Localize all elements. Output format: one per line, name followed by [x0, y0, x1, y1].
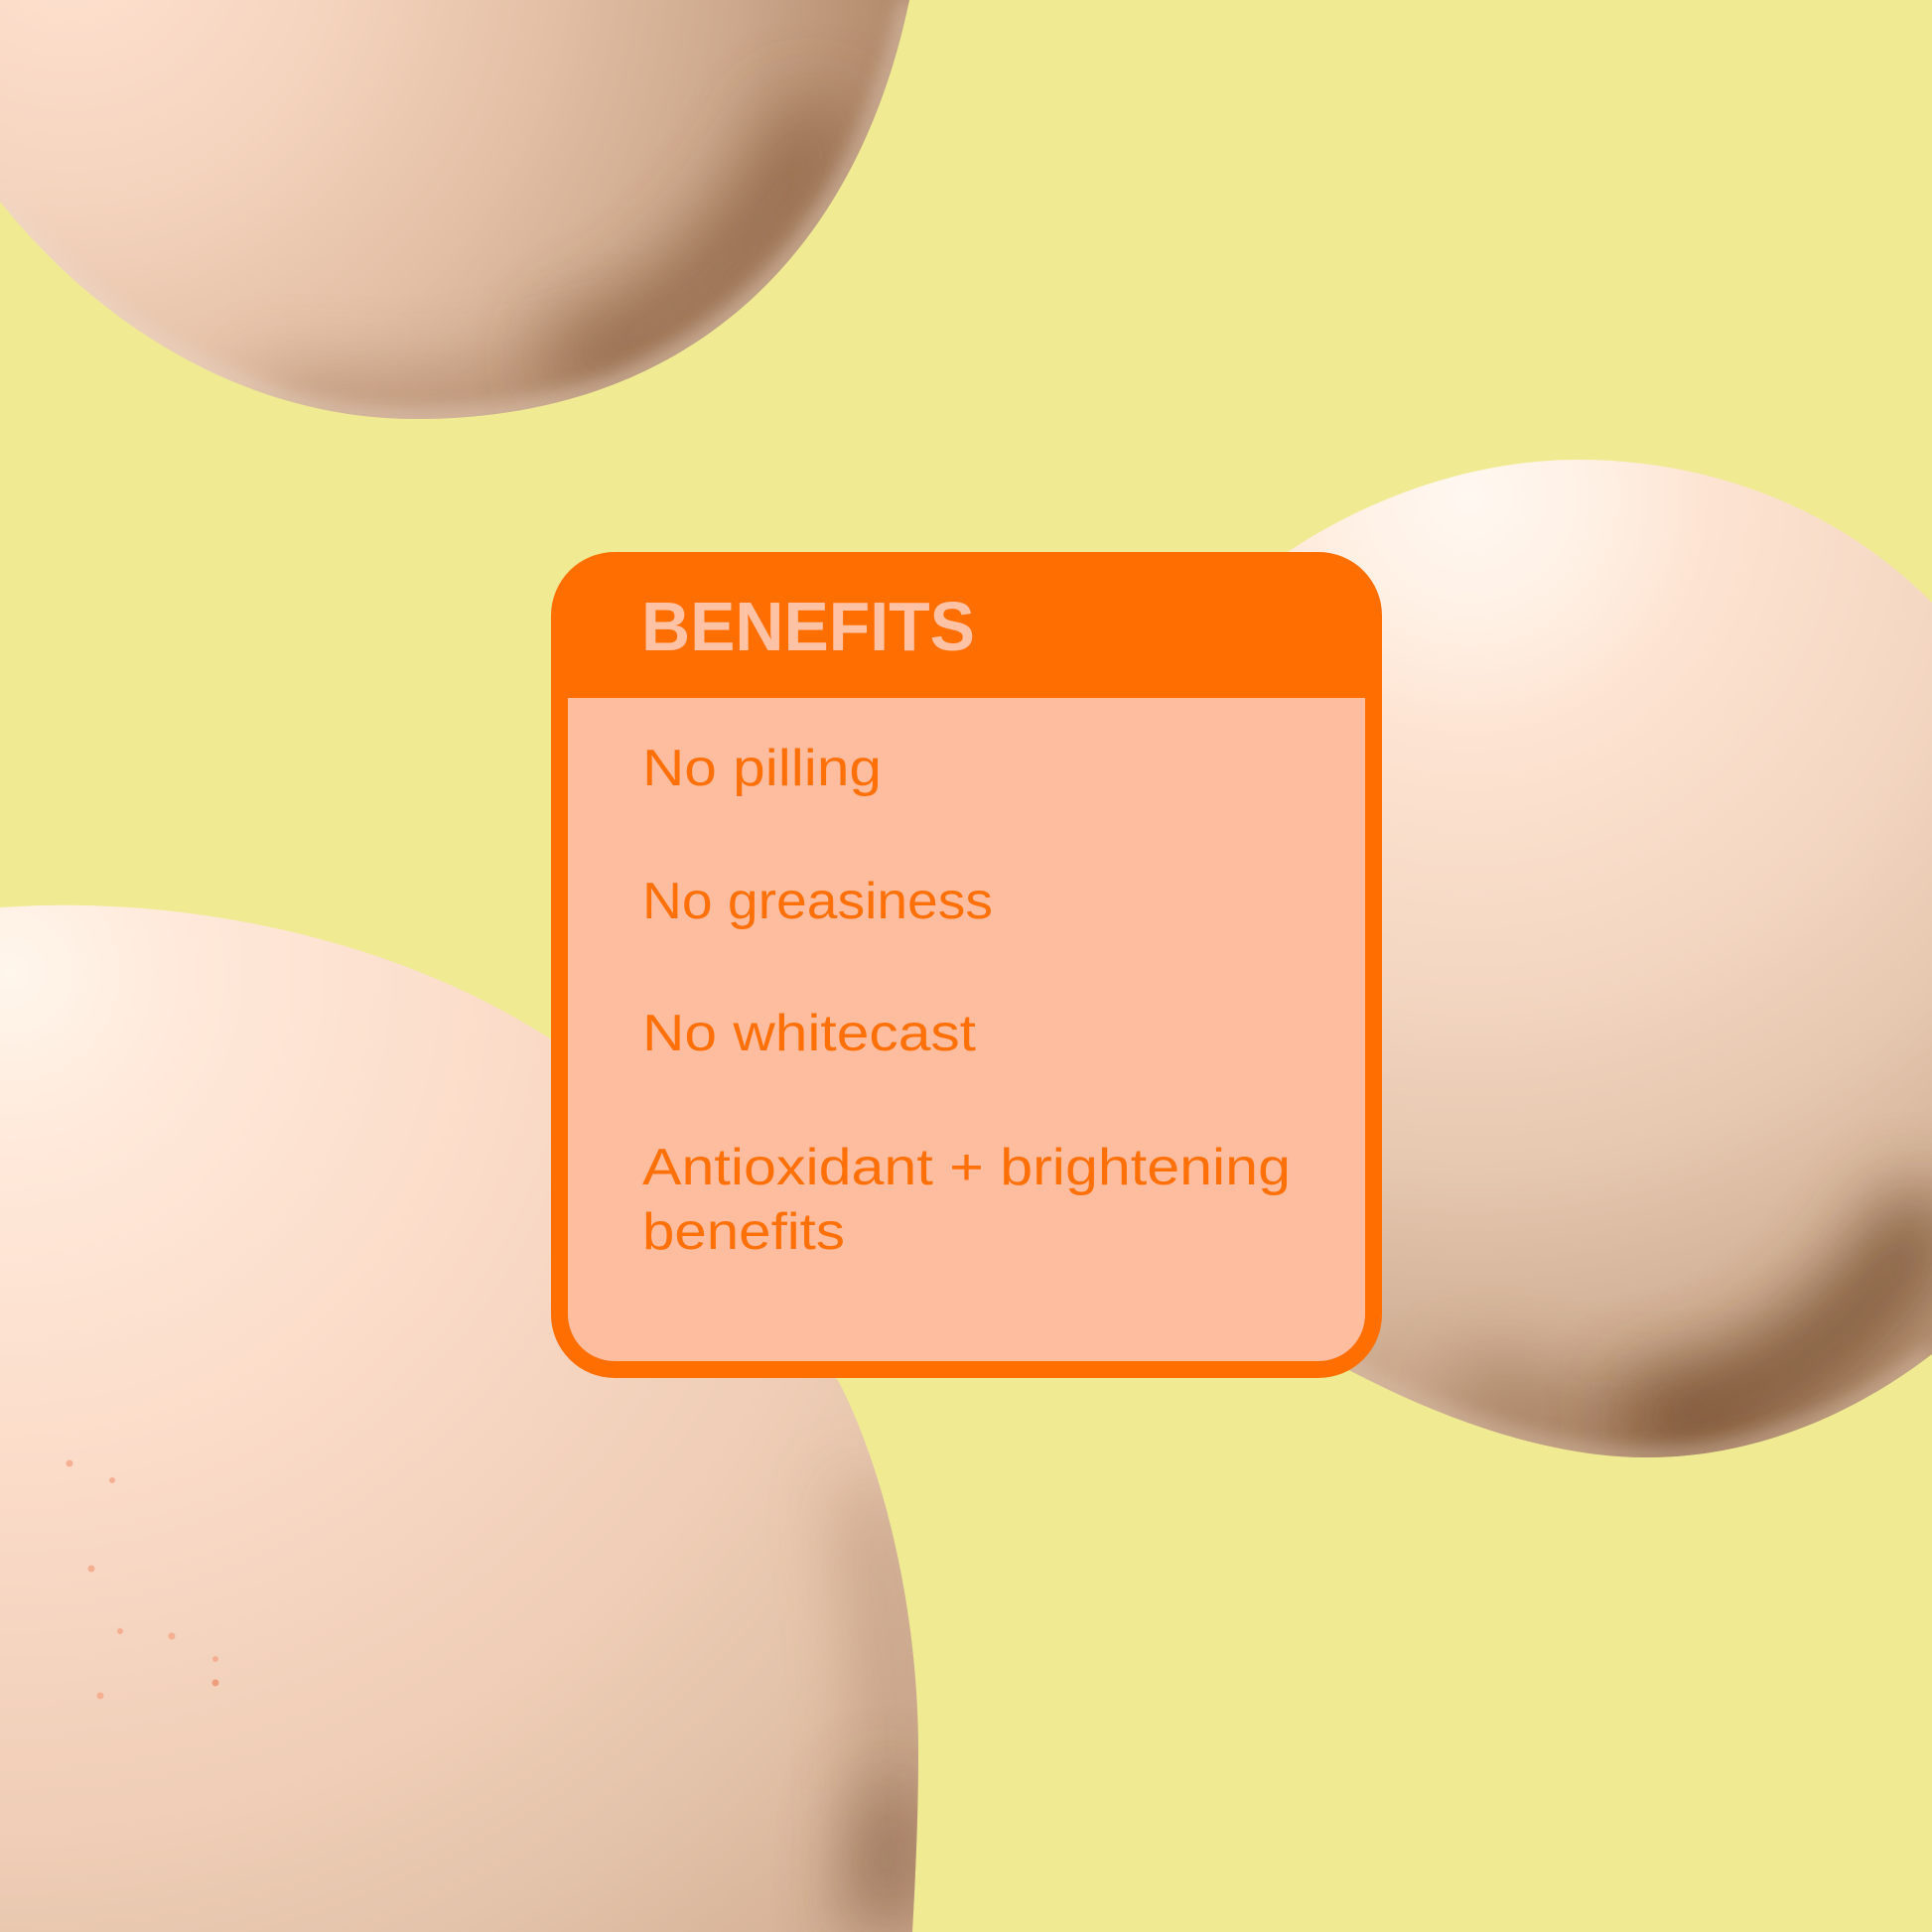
benefit: no pilling: No pilling: [642, 740, 882, 797]
benefit: antioxidant and brightening: Antioxidant + brightening: [642, 1139, 1291, 1196]
panel: benefits card: [551, 552, 1382, 1378]
cream blob: bottom left: [0, 894, 933, 1932]
card frame: [551, 552, 1382, 1378]
orange specks: [66, 1459, 218, 1700]
benefit: antioxidant second line: benefits: [642, 1203, 845, 1261]
benefit: no greasiness: No greasiness: [642, 873, 993, 930]
cream blob: top left: [0, 0, 923, 427]
cream blob: right: [1288, 460, 1932, 1457]
benefit: no whitecast: No whitecast: [642, 1005, 977, 1062]
heading: BENEFITS: [641, 588, 975, 665]
card body: [568, 698, 1365, 1361]
